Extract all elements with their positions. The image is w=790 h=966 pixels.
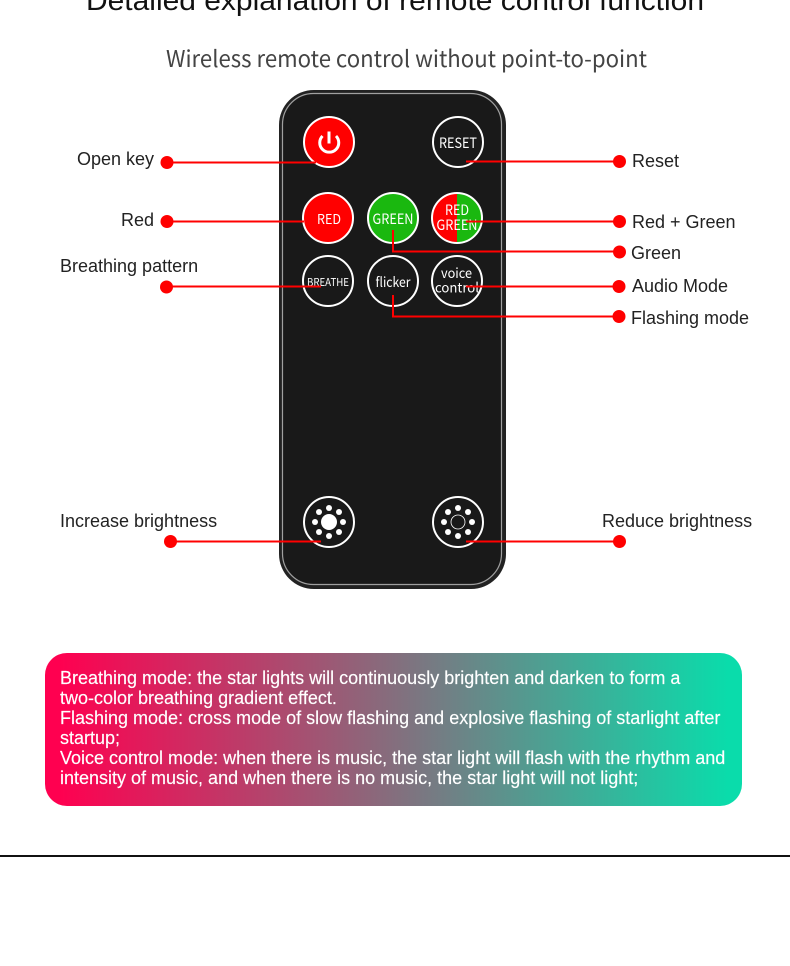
description text: intensity of music, and when there is no music, the star light will not light;: [60, 768, 638, 788]
callout: audio mode: Audio Mode: [632, 276, 728, 296]
callout: increase brightness: Increase brightness: [60, 511, 217, 531]
callout: red + green: Red + Green: [632, 212, 736, 232]
panel: mode descriptions: [45, 653, 742, 806]
callout: green: Green: [631, 243, 681, 263]
button: reduce brightness: [433, 497, 483, 547]
callout: red: [121, 210, 304, 230]
button: reset: RESET: [439, 133, 477, 153]
bottom rule: [0, 855, 790, 857]
callout: green: [393, 230, 681, 263]
callout: open key: [77, 149, 316, 169]
description text: [60, 668, 725, 788]
description text: Flashing mode: cross mode of slow flashing and explosive flashing of starlight after: [60, 708, 720, 728]
callout: red: Red: [121, 210, 154, 230]
callout: breathing pattern: [60, 256, 321, 294]
callout: flashing mode: [393, 295, 749, 328]
button: red and green: [432, 193, 482, 243]
description text: Voice control mode: when there is music, the star light will flash with the rhythm and: [60, 748, 725, 768]
button: green: GREEN: [372, 209, 414, 229]
callout: open key: Open key: [77, 149, 154, 169]
button: increase brightness: [304, 497, 354, 547]
callout: flashing mode: Flashing mode: [631, 308, 749, 328]
callout: increase brightness: [60, 511, 321, 548]
button: red and green: GREEN: [436, 215, 478, 235]
callout: breathing pattern: Breathing pattern: [60, 256, 198, 276]
button: voice control: [432, 256, 482, 306]
button: red: RED: [317, 208, 341, 228]
button: flicker: flicker: [376, 272, 411, 292]
button: reset: [433, 117, 483, 167]
button: voice control: control: [435, 276, 479, 296]
callout: red + green: [466, 212, 736, 232]
callout: audio mode: [466, 276, 728, 296]
subtitle: Wireless remote control without point-to-point: [166, 40, 647, 74]
callout: reduce brightness: [466, 511, 752, 548]
description text: startup;: [60, 728, 120, 748]
button: breathe: BREATHE: [307, 275, 349, 290]
button: power: [304, 117, 354, 167]
callout: reduce brightness: Reduce brightness: [602, 511, 752, 531]
button: red: [303, 193, 353, 243]
description text: two-color breathing gradient effect.: [60, 688, 337, 708]
button: breathe: [303, 256, 353, 306]
callout: reset: Reset: [632, 151, 679, 171]
description text: Breathing mode: the star lights will continuously brighten and darken to form a: [60, 668, 680, 688]
button: voice control: voice: [441, 262, 472, 282]
button: red and green: RED: [445, 200, 469, 220]
callout: reset: [466, 151, 679, 171]
button: flicker: [368, 256, 418, 306]
remote body: [279, 90, 506, 589]
button: green: [368, 193, 418, 243]
